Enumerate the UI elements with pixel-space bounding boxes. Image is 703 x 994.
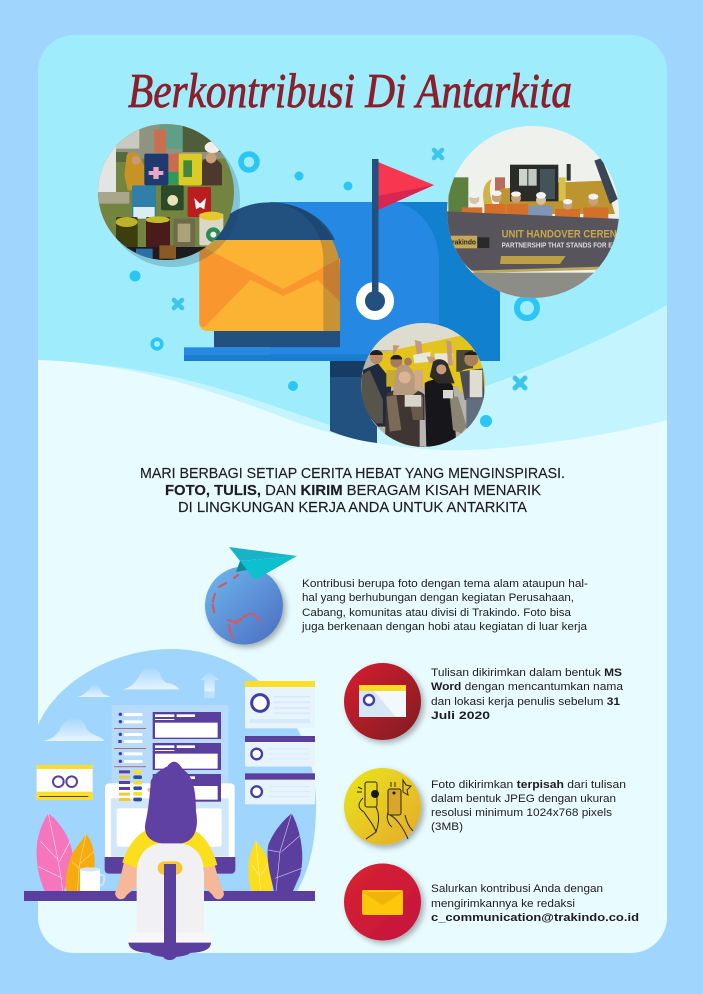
screen panels xyxy=(153,712,221,802)
icon: document xyxy=(344,663,421,740)
photo: team with documents xyxy=(358,320,488,450)
heading text: DI LINGKUNGAN KERJA ANDA UNTUK ANTARKITA xyxy=(178,500,527,516)
text: email address: Salurkan kontribusi Anda dengan xyxy=(431,883,603,895)
text: article requirements: Tulisan dikirimkan dalam bentuk MS xyxy=(431,667,622,679)
icon: globe with paper plane xyxy=(205,547,297,644)
mailbox body xyxy=(270,202,500,361)
text: photo theme xyxy=(301,578,588,633)
text: article requirements: dan lokasi kerja penulis sebelum 31 xyxy=(431,696,620,708)
floating window: purple header xyxy=(245,736,315,767)
photo: unit handover xyxy=(445,124,621,300)
text: photo theme: Kontribusi berupa foto dengan tema alam ataupun hal- xyxy=(302,578,588,590)
heading text: MARI BERBAGI SETIAP CERITA HEBAT YANG MENGINSPIRASI. xyxy=(140,466,565,482)
illustration backdrop xyxy=(38,649,316,892)
yellow shirt xyxy=(122,830,217,868)
banner text xyxy=(452,230,616,248)
plants xyxy=(37,813,302,892)
mailbox illustration xyxy=(184,159,500,443)
banner text: PARTNERSHIP THAT STANDS FOR EX xyxy=(502,241,617,250)
text: article requirements xyxy=(431,667,624,722)
step: MS Word article xyxy=(344,663,624,740)
photo: painted buckets xyxy=(96,122,236,264)
mailbox door and envelope xyxy=(184,202,384,361)
settings list xyxy=(114,713,146,801)
icon: hands with camera and phone xyxy=(344,768,421,845)
heading text xyxy=(140,466,565,516)
text: photo requirements: resolusi minimum 1024x768 pixels xyxy=(431,807,613,819)
chair back xyxy=(137,843,204,933)
text: email address xyxy=(431,883,639,924)
banner text: UNIT HANDOVER CEREN xyxy=(502,228,617,240)
video card with glasses xyxy=(37,765,93,800)
title: Berkontribusi Di Antarkita xyxy=(128,63,572,118)
text: photo requirements: dalam bentuk JPEG dengan ukuran xyxy=(431,793,616,805)
text: article requirements: Word dengan mencantumkan nama xyxy=(431,681,624,693)
heading text: FOTO, TULIS, DAN KIRIM BERAGAM KISAH MENARIK xyxy=(165,483,541,499)
desk xyxy=(24,891,315,901)
photo overlay circle xyxy=(104,131,240,267)
arms xyxy=(115,862,137,899)
step: send email xyxy=(344,864,639,940)
person xyxy=(115,762,224,960)
mailbox post xyxy=(330,361,377,443)
text: photo requirements: Foto dikirimkan terpisah dari tulisan xyxy=(431,779,626,791)
illustration: woman at desk xyxy=(24,649,316,960)
text: photo requirements: (3MB) xyxy=(431,821,463,833)
floating window: purple header lower xyxy=(245,773,315,804)
computer monitor xyxy=(105,705,235,874)
hair xyxy=(145,762,197,844)
text: photo theme: juga berkenaan dengan hobi atau kegiatan di luar kerja xyxy=(301,621,587,633)
mailbox flag xyxy=(360,159,434,316)
text: photo theme: Cabang, komunitas atau divisi di Trakindo. Foto bisa xyxy=(302,607,571,619)
text: email address: c_communication@trakindo.co.id xyxy=(431,912,639,924)
text: photo requirements xyxy=(431,779,626,833)
clouds xyxy=(42,668,219,741)
icon: envelope xyxy=(344,864,421,940)
chair seat and base xyxy=(127,932,213,943)
text: email address: mengirimkannya ke redaksi xyxy=(431,898,575,910)
step: separate photo xyxy=(344,768,626,845)
banner text: rakindo xyxy=(452,240,476,247)
text: article requirements: Juli 2020 xyxy=(431,710,490,722)
text: photo theme: hal yang berhubungan dengan kegiatan Perusahaan, xyxy=(302,592,574,604)
decorative dots, rings and crosses xyxy=(130,150,537,427)
floating window: yellow header xyxy=(245,681,315,728)
